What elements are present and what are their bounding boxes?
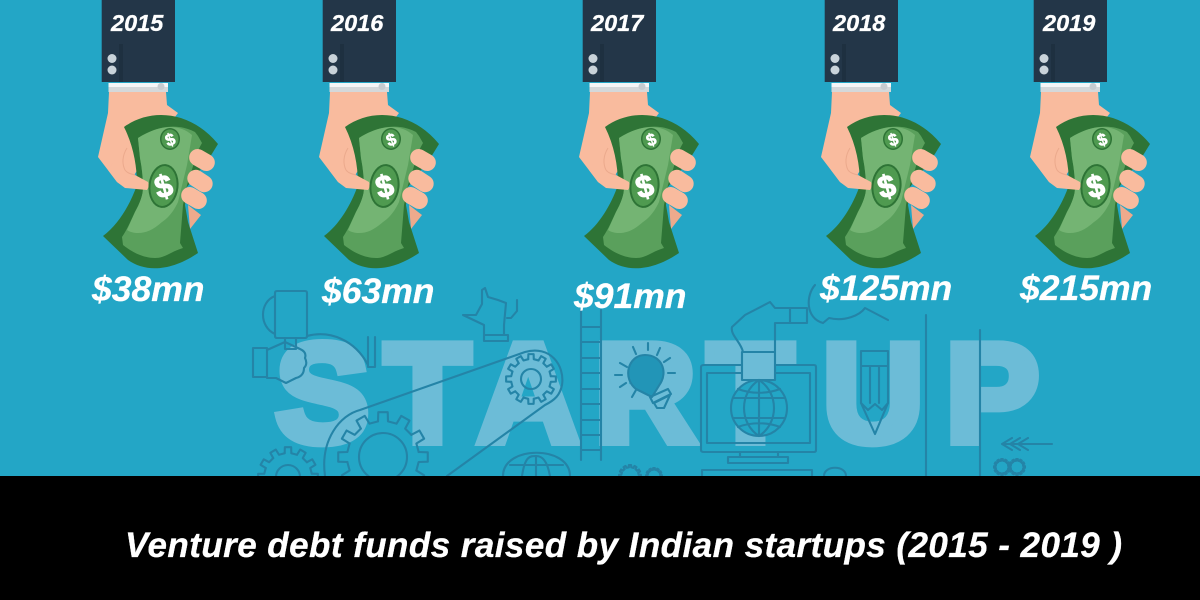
icon: monitor with globe and hand (701, 302, 846, 476)
icon: arrow left (1002, 438, 1052, 450)
title: Venture debt funds raised by Indian startups (2015 - 2019 ) (125, 526, 1122, 565)
icon: megaphone with hand (253, 291, 375, 383)
column: 2016 (319, 0, 439, 311)
year label 2018: 2018 (832, 10, 886, 36)
value 2015: $38mn (91, 269, 204, 309)
value 2016: $63mn (321, 271, 434, 311)
background word: STARTUP: STARTUP (276, 316, 1039, 471)
icon: hand holding cash 2018 (821, 0, 941, 268)
icon: hand holding cash 2015 (98, 0, 218, 268)
icon: small gears right (994, 459, 1025, 475)
icon: pencil (861, 351, 888, 434)
background (0, 0, 1200, 476)
year label 2016: 2016 (330, 10, 384, 36)
column: 2019 (1019, 0, 1152, 308)
year label 2015: 2015 (110, 10, 164, 36)
footer band (0, 476, 1200, 600)
column: 2017 (573, 0, 699, 316)
column: 2015 (91, 0, 218, 309)
icon: speech bubble (809, 285, 888, 323)
column: 2018 (819, 0, 952, 308)
line art: startup illustration (253, 285, 1052, 507)
icon: small gears centre (619, 465, 662, 487)
year label 2019: 2019 (1042, 10, 1095, 36)
icon: hand holding cash 2016 (319, 0, 439, 268)
icon: hand holding cash 2017 (579, 0, 699, 268)
icon: ladder (581, 310, 601, 460)
value 2017: $91mn (573, 276, 686, 316)
decorative lines (926, 315, 980, 476)
value 2019: $215mn (1019, 268, 1152, 308)
year label 2017: 2017 (590, 10, 644, 36)
icon: gear belt (258, 351, 562, 507)
icon: light bulb (615, 343, 675, 408)
value 2018: $125mn (819, 268, 952, 308)
icon: hand holding cash 2019 (1030, 0, 1150, 268)
icon: small globe lower (503, 453, 570, 476)
icon: pointing hand (463, 288, 517, 341)
